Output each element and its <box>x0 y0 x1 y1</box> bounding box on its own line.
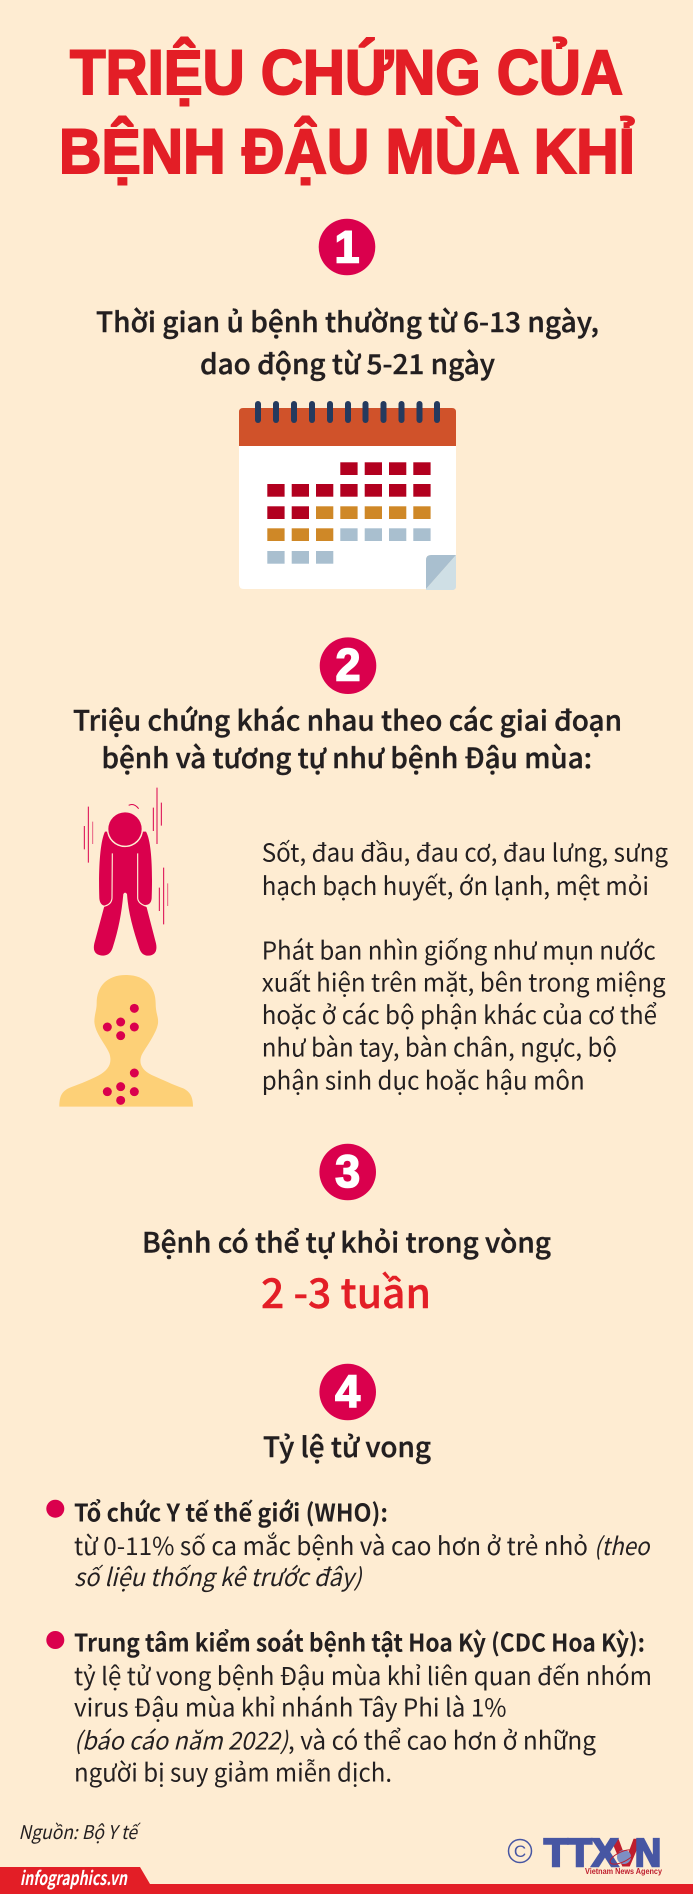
bullet item: CDC: Trung tâm kiểm soát bệnh tật Hoa Kỳ (CDC Hoa Kỳ): <box>74 1625 645 1660</box>
section 1 text <box>96 300 599 382</box>
source note: Nguồn: Bộ Y tế <box>18 1818 141 1845</box>
title: TRIỆU CHỨNG CỦA <box>70 37 623 108</box>
text: rash symptoms: phận sinh dục hoặc hậu môn <box>262 1062 585 1097</box>
number badge 2: 2 <box>335 640 361 690</box>
number badge 4: 4 <box>335 1366 360 1417</box>
title <box>59 37 635 187</box>
bullet item: CDC <box>46 1625 652 1790</box>
bullet item: WHO <box>46 1495 651 1594</box>
bullet item: WHO: (theo <box>594 1528 651 1563</box>
section 4 heading: Tỷ lệ tử vong <box>263 1425 431 1465</box>
logo: TTXVN: TTX <box>544 1832 618 1875</box>
section 2 heading <box>73 699 622 776</box>
number badge 3 <box>319 1144 376 1200</box>
bullet item: CDC: , và có thể cao hơn ở những <box>288 1722 596 1757</box>
bullet item: CDC: tỷ lệ tử vong bệnh Đậu mùa khỉ liên quan đến nhóm <box>74 1658 652 1693</box>
number badge 1 <box>319 219 375 275</box>
title: BỆNH ĐẬU MÙA KHỈ <box>59 116 635 187</box>
text: early symptoms: Sốt, đau đầu, đau cơ, đau lưng, sưng <box>262 835 668 870</box>
number badge 2 <box>320 637 376 694</box>
section 1 text: dao động từ 5-21 ngày <box>200 342 495 382</box>
section 2 heading: bệnh và tương tự như bệnh Đậu mùa: <box>102 736 592 776</box>
number badge 1: 1 <box>334 222 360 272</box>
text: rash symptoms: hoặc ở các bộ phận khác của cơ thể <box>262 997 657 1032</box>
text: rash symptoms <box>262 932 666 1097</box>
number badge 4 <box>319 1364 376 1420</box>
bullet item: CDC: người bị suy giảm miễn dịch. <box>74 1755 392 1790</box>
logo: TTXVN: V <box>611 1832 641 1875</box>
logo: TTXVN <box>508 1832 662 1876</box>
section 3 text <box>142 1221 551 1320</box>
footer bar: infographics.vn <box>20 1864 128 1891</box>
section 3 text: Bệnh có thể tự khỏi trong vòng <box>142 1221 551 1261</box>
footer bar <box>0 1864 693 1894</box>
text: early symptoms <box>262 835 668 903</box>
bullet item: WHO: số liệu thống kê trước đây) <box>74 1559 363 1594</box>
number badge 3: 3 <box>335 1146 360 1197</box>
bullet item: CDC: virus Đậu mùa khỉ nhánh Tây Phi là 1% <box>74 1690 506 1725</box>
bullet item: WHO: Tổ chức Y tế thế giới (WHO): <box>74 1495 388 1530</box>
bullet item: CDC: (báo cáo năm 2022) <box>74 1722 290 1757</box>
icon: calendar <box>239 401 456 590</box>
text: rash symptoms: xuất hiện trên mặt, bên trong miệng <box>262 965 666 1000</box>
section 1 text: Thời gian ủ bệnh thường từ 6-13 ngày, <box>96 300 599 340</box>
logo: TTXVN: C <box>514 1842 526 1861</box>
logo: TTXVN: N <box>635 1832 661 1875</box>
section 3 text: 2 -3 tuần <box>261 1260 431 1320</box>
text: early symptoms: hạch bạch huyết, ớn lạnh, mệt mỏi <box>262 868 649 903</box>
section 2 heading: Triệu chứng khác nhau theo các giai đoạn <box>73 699 622 739</box>
icon: head and shoulders with rash <box>59 975 193 1107</box>
text: rash symptoms: Phát ban nhìn giống như mụn nước <box>262 932 656 967</box>
bullet item: WHO: từ 0-11% số ca mắc bệnh và cao hơn ở trẻ nhỏ <box>74 1528 588 1563</box>
icon: trembling person <box>84 788 168 956</box>
logo: TTXVN: Vietnam News Agency <box>585 1866 662 1876</box>
text: rash symptoms: như bàn tay, bàn chân, ngực, bộ <box>262 1030 617 1065</box>
